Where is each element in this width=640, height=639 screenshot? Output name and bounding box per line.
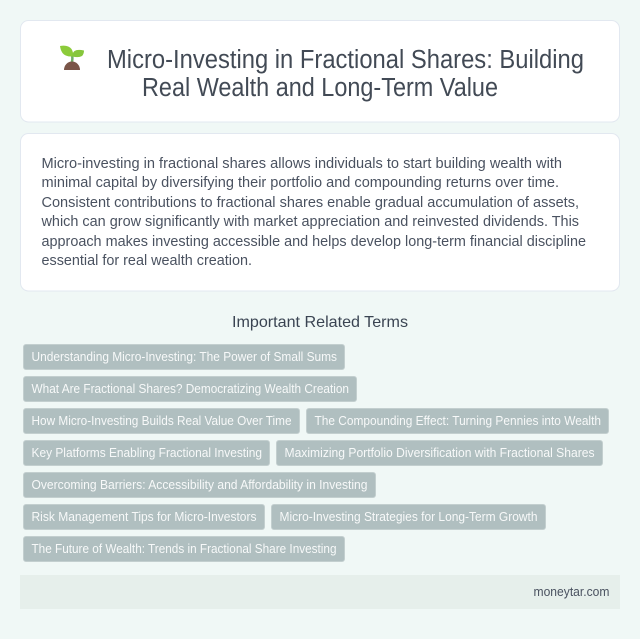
chip: understanding micro-investing (24, 344, 344, 370)
icon: seedling (60, 46, 84, 70)
chip: risk management (24, 504, 264, 530)
summary paragraph: Micro-investing in fractional shares allows individuals to start building wealth with (42, 156, 562, 172)
chip: compounding effect (306, 408, 608, 434)
chip: overcoming barriers (24, 472, 376, 498)
chip: what are fractional shares: What Are Fractional Shares? Democratizing Wealth Creation (32, 381, 349, 396)
chip: key platforms (24, 440, 270, 466)
chip: strategies (272, 504, 546, 530)
footer source text: moneytar.com (534, 585, 610, 599)
chip: strategies: Micro-Investing Strategies for Long-Term Growth (280, 509, 538, 524)
title: Micro-Investing in Fractional Shares: Building (107, 46, 584, 74)
summary paragraph: essential for real wealth creation. (42, 253, 252, 269)
chip: builds real value: How Micro-Investing Builds Real Value Over Time (32, 413, 292, 428)
chip: portfolio diversification (276, 440, 602, 466)
chip: understanding micro-investing: Understanding Micro-Investing: The Power of Small Sums (32, 349, 337, 364)
chip: risk management: Risk Management Tips for Micro-Investors (32, 509, 256, 524)
chip: what are fractional shares (24, 376, 356, 402)
panel: related term chips (24, 344, 608, 562)
title (107, 46, 584, 102)
panel: footer (20, 575, 620, 609)
title: Real Wealth and Long-Term Value (142, 74, 498, 102)
summary paragraph: minimal capital by diversifying their portfolio and compounding returns over time. (42, 175, 559, 191)
summary paragraph: which can grow significantly with market appreciation and reinvested dividends. This (41, 214, 579, 230)
summary paragraph (41, 156, 586, 269)
heading: related terms: Important Related Terms (232, 314, 408, 331)
chip: future of wealth (24, 536, 344, 562)
summary paragraph: Consistent contributions to fractional shares enable gradual accumulation of assets, (42, 195, 579, 211)
chip: builds real value (24, 408, 300, 434)
chip: portfolio diversification: Maximizing Portfolio Diversification with Fractional Shares (284, 445, 594, 460)
chip: compounding effect: The Compounding Effect: Turning Pennies into Wealth (314, 413, 601, 428)
chip: key platforms: Key Platforms Enabling Fractional Investing (32, 445, 262, 460)
chip: future of wealth: The Future of Wealth: Trends in Fractional Share Investing (32, 541, 336, 556)
panel: summary card (20, 134, 620, 291)
panel: title card (20, 20, 620, 122)
chip: overcoming barriers: Overcoming Barriers: Accessibility and Affordability in Investing (32, 477, 368, 492)
summary paragraph: approach makes investing accessible and helps develop long-term financial discipline (42, 234, 586, 250)
